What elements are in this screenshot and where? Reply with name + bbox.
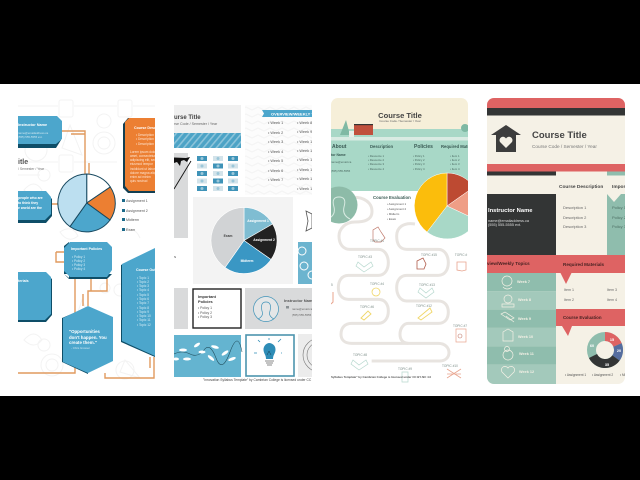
required materials: Item 1 [564,288,574,292]
course topics box: • Topic 5 [137,293,149,297]
column lists: • Resource 3 [368,162,385,166]
course evaluation: • Midterm [387,212,400,216]
course evaluation [373,195,411,221]
weeks list: • Week 13 [297,168,314,172]
weekly topic rows: Week 8 [518,298,531,302]
column lists: • Policy 4 [413,167,425,171]
green header [331,129,468,191]
orange course description box: • Description 3 [136,142,157,146]
weekly topics background [245,105,312,195]
course topics box: • Topic 12 [137,323,151,327]
topic 10 [398,367,412,382]
important policies card: Important [198,294,217,299]
topic 4 [370,282,384,296]
column lists: (555) 555-5555 [331,169,351,173]
orange course description box: adipiscing elit, sed [130,158,156,162]
left quote box [18,191,52,223]
topic 8 [455,253,467,271]
column lists: • Policy 3 [413,162,425,166]
course title: / Semester / Year [18,167,45,171]
green strip [607,172,625,176]
topic 9 [351,353,368,370]
weeks list: • Week 3 [268,140,283,144]
left quote box: e world are the [18,206,42,210]
instructor block: (555) 555-5555 ext. [488,223,521,227]
title block [174,105,241,133]
donut legend: • Midterm [620,373,634,377]
pie legend: Exam [126,228,135,232]
pie legend: Midterm [126,218,139,222]
icon: bush [461,124,468,132]
topic 15: TOPIC #15 [421,253,437,257]
column lists: • Resource 2 [368,158,385,162]
required materials [556,255,625,302]
topic 12 [416,304,432,320]
orange course description box: • Description 2 [136,137,157,141]
teal checklist panel [298,242,312,284]
column lists: • Policy 2 [413,158,425,162]
cream header [331,98,468,129]
orange course description box: quis nostrud [130,179,148,183]
column lists: • Resource 1 [368,154,385,158]
column headings [331,144,479,157]
overview ribbon [262,110,312,117]
weeks list: • Week 10 [297,140,314,144]
pie chart [58,174,115,232]
title block: urse Title [174,115,201,121]
column headings: Description [370,144,393,149]
weeks list: • Week 15 [297,187,314,191]
weeks list: • Week 8 [297,121,312,125]
donut chart [590,336,621,367]
light bulb card [246,335,294,376]
important policies card: Policies [198,299,213,304]
panel: grey and teal syllabus [174,105,312,382]
course evaluation: • Assignment 2 [387,207,407,211]
weeks list: • Week 1 [268,121,283,125]
topic 7: TOPIC #7 [453,324,467,328]
course evaluation: • Exam [387,217,397,221]
instructor block: Instructor Name [488,208,533,214]
weeks list: • Week 11 [297,149,314,153]
course title [18,159,45,171]
quote hexagon: - Chris Grosser [71,346,90,350]
left quote box: people who are [18,196,43,200]
weekly topic rows: Week 12 [519,370,534,374]
course topics box: • Topic 7 [137,301,149,305]
important policies box [64,242,112,279]
title [532,130,597,149]
icon: tree [340,120,350,135]
white video frame [0,84,640,396]
pie panel [193,197,293,284]
topic 10: TOPIC #9 [398,367,412,371]
required materials: Required Materials [563,262,605,267]
overview band [487,255,625,273]
caption: "Innovation Syllabus Template" by Cambrian College is licensed under CC BY-NC 4.0 [203,378,328,382]
topic 4: TOPIC #4 [370,282,384,286]
weeks list: • Week 2 [268,131,283,135]
topic 1: TOPIC #1 [370,239,384,243]
important policies box: • Policy 1 [72,255,85,259]
scroll icon [306,211,312,231]
panel: landscape road syllabus [331,98,468,382]
required materials box [18,272,52,322]
grey bar [174,288,188,329]
course description: Description 1 [563,205,587,210]
faint technology background pattern [18,100,155,379]
column lists: • Item 2 [450,158,460,162]
topic 13: TOPIC #13 [419,283,435,287]
orange course description box: Course Description [134,126,167,130]
important policies box: • Policy 3 [72,263,85,267]
required materials box: terials [18,279,29,283]
pie legend: Assignment 2 [126,209,148,213]
topic 9: TOPIC #8 [353,353,367,357]
required materials: Item 3 [607,288,617,292]
column lists: • Resource 4 [368,167,385,171]
instructor box: name@emailaddress.ca [18,131,49,135]
orange course description box: eiusmod tempor [130,162,154,166]
instructor card: Instructor Name [284,298,315,303]
topic 1 [370,227,385,243]
pie panel: Assignment 1 [247,219,269,223]
important policies card: • Policy 2 [198,311,212,315]
column lists: • Policy 1 [413,154,425,158]
donut legend [565,373,634,377]
important policies card [193,289,241,328]
top dark band [487,108,625,116]
title block: rse Code / Semester / Year [174,122,218,126]
topic 11 [442,364,461,378]
course description [559,184,603,229]
topic 7 [453,324,467,342]
donut legend: • Assignment 2 [592,373,613,377]
instructor card [245,288,315,329]
course evaluation band: Course Evaluation [563,315,602,320]
overview ribbon: OVERVIEW/WEEKLY TOPICS [271,112,327,116]
column lists: • Item 4 [450,167,460,171]
connector lines [18,131,154,378]
orange course description box: dolore magna aliqua [130,171,159,175]
mid red band [487,164,625,172]
course topics box: • Topic 2 [137,280,149,284]
instructor card: (555) 555-5555 [292,313,312,317]
important policies card: • Policy 1 [198,306,212,310]
pie panel: Assignment 2 [253,238,275,242]
column lists: • Item 3 [450,162,460,166]
column headings: Required Materials [441,144,479,149]
pie legend [122,199,148,232]
course evaluation: Course Evaluation [373,195,411,200]
course topics box: • Topic 11 [137,318,151,322]
left quote box: to think they [18,201,38,205]
orange course description box: • Description 1 [136,133,157,137]
striped band [174,133,241,148]
topic 13 [418,283,435,298]
weeks list: • Week 12 [297,158,314,162]
topic icons and labels [329,227,467,382]
important policies: Policy 2 [612,215,627,220]
small left note: N [174,255,176,259]
title: Course Title [378,111,422,120]
pie chart [414,173,480,239]
donut chart: 15 [610,338,614,342]
teal wave panel [173,335,242,377]
light strip [331,137,468,140]
course evaluation: • Assignment 1 [387,202,407,206]
grey circle card [298,334,312,377]
donut chart: 35 [605,363,609,367]
weeks list: • Week 6 [268,169,283,173]
important policies box: Important Policies [71,247,102,251]
donut chart: 60 [590,344,594,348]
topic 12: TOPIC #12 [416,304,432,308]
instructor box: (555) 555-5555 ext. [18,135,43,139]
course topics box: • Topic 8 [137,306,149,310]
course topics box: • Topic 4 [137,288,149,292]
orange course description box [123,118,155,193]
orange course description box: incididunt ut labore [130,167,157,171]
course evaluation band [556,309,625,336]
panel: blue and orange syllabus [18,100,155,380]
course topics box: • Topic 9 [137,310,149,314]
topic 3: TOPIC #3 [358,255,372,259]
quote hexagon: don't happen. You [69,335,107,340]
important policies card: • Policy 3 [198,315,212,319]
topic 15 [417,253,437,269]
grey column with climber icon [174,153,191,238]
weeks list: • Week 7 [268,178,283,182]
pie legend: Assignment 1 [126,199,148,203]
icon: house with heart [491,125,521,152]
title: Course Title [532,130,587,141]
pie panel: Midterm [241,259,253,263]
important policies: Policy 3 [612,224,627,229]
course description: Description 3 [563,224,587,229]
topic 8: TOPIC # [455,253,467,257]
overview band: view/Weekly Topics [487,261,530,266]
weekly topic rows: Week 9 [518,317,531,321]
quote hexagon: "Opportunities [69,329,100,334]
course topics box: • Topic 10 [137,314,151,318]
title: Course Code / Semester / Year [379,119,421,123]
title: Course Code / Semester / Year [532,144,597,149]
pie panel: Exam [224,234,232,238]
orange course description box: enim ad minim [130,175,151,179]
required materials: Item 4 [607,298,617,302]
course topics box: • Topic 1 [137,276,149,280]
column headings: About [332,144,347,150]
instructor box [17,116,62,148]
weeks list: • Week 5 [268,159,283,163]
course description: Course Description [559,184,603,190]
column lists [331,154,460,173]
dark strip [487,172,556,176]
important policies box: • Policy 2 [72,259,85,263]
title [378,112,422,122]
column headings: Policies [414,144,433,150]
topic 3 [356,255,373,272]
instructor box: Instructor Name [18,123,47,127]
important policies [607,184,640,255]
caption: Syllabus Template" by Cambrian College is licensed under CC BY-NC 4.0 [331,375,431,379]
course description: Description 2 [563,215,587,220]
instructor avatar [320,186,358,224]
weekly topic rows: Week 7 [517,280,530,284]
road [330,197,449,361]
topic 5 [329,283,333,304]
course topics box: • Topic 6 [137,297,149,301]
column headings: tor Name [331,153,346,157]
course topics box [121,248,155,357]
course title: itle [18,159,28,166]
quote hexagon: create them." [69,340,97,345]
weekly topic rows [487,273,556,384]
important policies box: • Policy 4 [72,267,85,271]
weekly topic rows: Week 11 [519,352,534,356]
icon: red barn [349,124,373,137]
important policies: Policy 1 [612,205,627,210]
topic 5: #5 [329,283,333,287]
instructor block: name@emailaddress.ca [488,219,530,223]
instructor block [487,194,556,255]
weeks list: • Week 4 [268,150,283,154]
course topics box: Course Outline [136,268,162,272]
orange course description box: amet, consectetur [130,154,156,158]
weeks list: • Week 9 [297,130,312,134]
topic 11: TOPIC #10 [442,364,458,368]
column lists: name@email.ca [331,160,352,164]
weeks list: • Week 14 [297,177,314,181]
donut legend: • Assignment 1 [565,373,586,377]
top red band [487,98,625,108]
instructor card: name@email.ca [292,307,313,311]
column lists: • Item 1 [450,154,460,158]
weekly topic rows: Week 10 [518,335,533,339]
course topics box: • Topic 3 [137,284,149,288]
orange course description box: Lorem ipsum dolor sit [130,150,161,154]
required materials: Item 2 [564,298,574,302]
icon grid [197,156,238,191]
panel: red and dark syllabus [487,98,640,384]
donut chart: 20 [617,349,621,353]
weeks list [268,121,314,191]
quote hexagon [62,306,113,374]
topic 6 [360,305,374,320]
topic 6: TOPIC #6 [360,305,374,309]
